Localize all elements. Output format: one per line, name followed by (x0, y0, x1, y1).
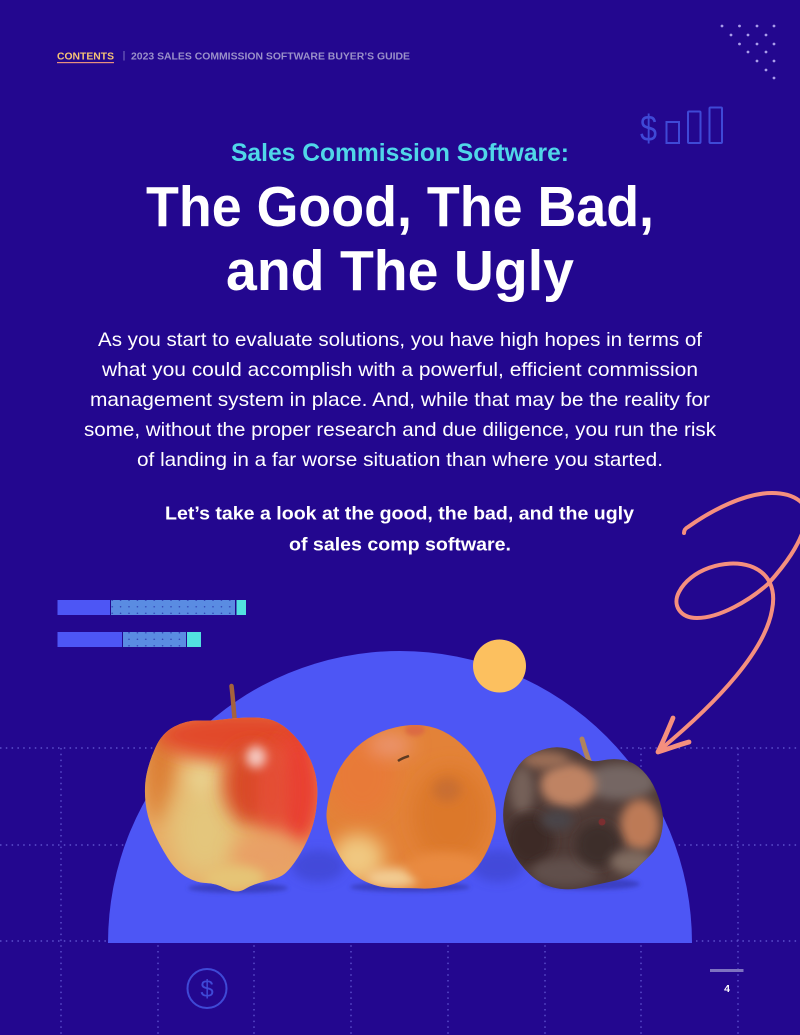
icon: dollar coin (188, 969, 226, 1008)
bar one (58, 600, 246, 615)
decorative dot triangle (721, 25, 775, 79)
intro paragraph: As you start to evaluate solutions, you have high hopes in terms of (98, 329, 703, 351)
page number (710, 969, 744, 995)
bold call to action: of sales comp software. (289, 534, 511, 554)
stacked bars (58, 600, 246, 647)
icon: dollar coin: $ (200, 976, 214, 1003)
icon: dollar and bars (640, 108, 722, 149)
fruit (503, 747, 663, 890)
dollar sign: $ (640, 108, 657, 149)
intro paragraph: what you could accomplish with a powerful, efficient commission (101, 359, 698, 381)
title: The Good, The Bad, (146, 175, 654, 239)
semicircle backdrop (108, 651, 692, 943)
title (146, 175, 654, 303)
dotted grid (0, 748, 800, 1035)
stem (232, 686, 234, 718)
apple: the ugly (498, 739, 668, 894)
bold call to action (165, 502, 635, 554)
hand-drawn arrow (658, 493, 800, 752)
intro paragraph (84, 329, 716, 471)
number: 4 (724, 983, 730, 995)
fruit (320, 720, 500, 892)
bars (666, 108, 722, 143)
running header (57, 51, 410, 63)
intro paragraph: of landing in a far worse situation than where you started. (137, 449, 663, 471)
bar two (58, 632, 201, 647)
apple: the bad (320, 720, 500, 892)
arrow head (658, 718, 689, 752)
intro paragraph: management system in place. And, while that may be the reality for (90, 389, 711, 411)
header label: contents: CONTENTS (57, 52, 114, 62)
title: and The Ugly (226, 239, 574, 303)
fruit (144, 718, 318, 892)
page marker (710, 969, 744, 972)
bold call to action: Let’s take a look at the good, the bad, and the ugly (165, 502, 635, 524)
header guide title: 2023 SALES COMMISSION SOFTWARE BUYER’S GUIDE (131, 52, 410, 62)
apple: the good (144, 684, 318, 892)
header underline (57, 62, 114, 63)
stem (582, 739, 590, 763)
header divider (124, 51, 125, 60)
yellow circle (473, 640, 526, 692)
arrow loop (661, 493, 800, 749)
intro paragraph: some, without the proper research and due diligence, you run the risk (84, 419, 716, 441)
subtitle: Sales Commission Software: (231, 139, 569, 167)
apple shadows (188, 850, 640, 893)
